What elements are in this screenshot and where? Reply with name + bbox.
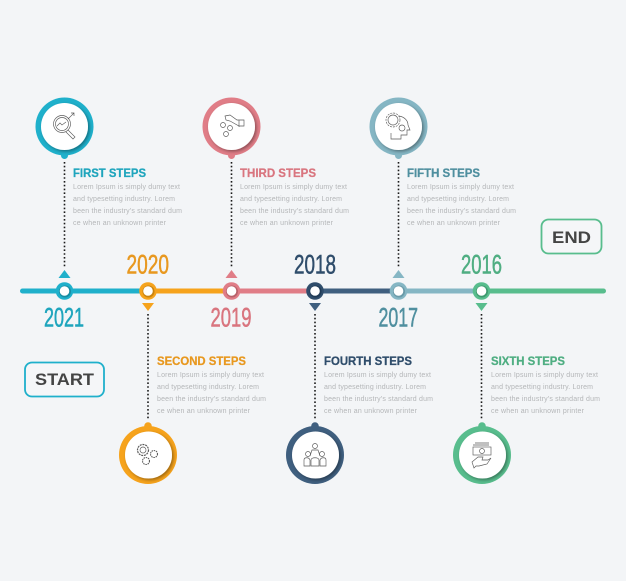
text block 5: ce when an unknown printer <box>407 220 501 227</box>
marker 6 <box>453 422 511 484</box>
year 2020: 2020 <box>126 250 169 280</box>
icon: gears <box>138 444 158 464</box>
marker 4 <box>286 422 344 484</box>
connector 6 <box>480 314 482 420</box>
connector 4 <box>314 314 316 420</box>
marker 3 <box>202 98 260 159</box>
text block 5: Lorem Ipsum is simply dumy text <box>407 184 514 191</box>
connector 1 <box>64 162 66 268</box>
text block 2: ce when an unknown printer <box>157 408 251 415</box>
marker 1 <box>36 98 94 159</box>
marker 5 <box>370 98 428 159</box>
text block 6: and typesetting industry. Lorem <box>491 384 593 391</box>
step 5: fifth steps <box>370 98 516 332</box>
text block 1: and typesetting industry. Lorem <box>73 196 175 203</box>
connector 5 <box>398 162 400 268</box>
text block 4: and typesetting industry. Lorem <box>324 384 426 391</box>
node 3 <box>223 282 240 300</box>
text block 5: been the industry's standard dum <box>407 208 516 215</box>
start label: START <box>35 370 95 389</box>
step 4: fourth steps <box>286 250 433 484</box>
icon: team <box>304 444 326 466</box>
text block 5: and typesetting industry. Lorem <box>407 196 509 203</box>
year 2019: 2019 <box>210 302 252 332</box>
start label <box>25 362 104 396</box>
text block 3: ce when an unknown printer <box>240 220 334 227</box>
text block 4: Lorem Ipsum is simply dumy text <box>324 372 431 379</box>
text block 1: Lorem Ipsum is simply dumy text <box>73 184 180 191</box>
text block 6: Lorem Ipsum is simply dumy text <box>491 372 598 379</box>
heading sixth steps: SIXTH STEPS <box>491 356 565 368</box>
icon: head with gears <box>386 113 410 139</box>
year 2017: 2017 <box>378 302 418 332</box>
heading fifth steps: FIFTH STEPS <box>407 168 480 180</box>
step 2: second steps <box>119 250 266 484</box>
triangle 3 <box>226 270 238 278</box>
year 2016: 2016 <box>461 250 502 280</box>
end label: END <box>552 228 591 247</box>
text block 4: been the industry's standard dum <box>324 396 433 403</box>
icon: hand with money <box>472 443 491 468</box>
icon: hand with coins <box>220 115 244 136</box>
step 3: third steps <box>202 98 349 332</box>
triangle 5 <box>392 270 404 278</box>
text block 2: and typesetting industry. Lorem <box>157 384 259 391</box>
text block 4 <box>324 372 433 415</box>
text block 6: been the industry's standard dum <box>491 396 600 403</box>
text block 3: and typesetting industry. Lorem <box>240 196 342 203</box>
heading second steps: SECOND STEPS <box>157 356 246 368</box>
node 4 <box>306 282 324 300</box>
timeline bar <box>22 288 604 294</box>
heading fourth steps: FOURTH STEPS <box>324 356 412 368</box>
text block 2: Lorem Ipsum is simply dumy text <box>157 372 264 379</box>
node 2 <box>139 282 157 300</box>
text block 5 <box>407 184 516 227</box>
text block 3: Lorem Ipsum is simply dumy text <box>240 184 347 191</box>
marker 2 <box>119 422 177 484</box>
triangle 1 <box>58 270 70 278</box>
text block 1 <box>73 184 182 227</box>
text block 3: been the industry's standard dum <box>240 208 349 215</box>
icon: magnifier chart <box>54 113 75 139</box>
text block 1: been the industry's standard dum <box>73 208 182 215</box>
triangle 6 <box>476 303 488 311</box>
text block 3 <box>240 184 349 227</box>
text block 6: ce when an unknown printer <box>491 408 585 415</box>
triangle 2 <box>142 303 154 311</box>
text block 4: ce when an unknown printer <box>324 408 418 415</box>
year 2021: 2021 <box>44 302 84 332</box>
heading first steps: FIRST STEPS <box>73 168 146 180</box>
text block 2: been the industry's standard dum <box>157 396 266 403</box>
year 2018: 2018 <box>294 250 336 280</box>
connector 3 <box>230 162 232 268</box>
step 6: sixth steps <box>453 250 600 484</box>
heading third steps: THIRD STEPS <box>240 168 316 180</box>
text block 1: ce when an unknown printer <box>73 220 167 227</box>
text block 6 <box>491 372 600 415</box>
node 1 <box>56 282 73 300</box>
step 1: first steps <box>36 98 182 332</box>
connector 2 <box>147 314 149 420</box>
node 6 <box>473 282 490 300</box>
triangle 4 <box>309 303 321 311</box>
text block 2 <box>157 372 266 415</box>
node 5 <box>390 282 407 300</box>
end label <box>542 220 602 254</box>
